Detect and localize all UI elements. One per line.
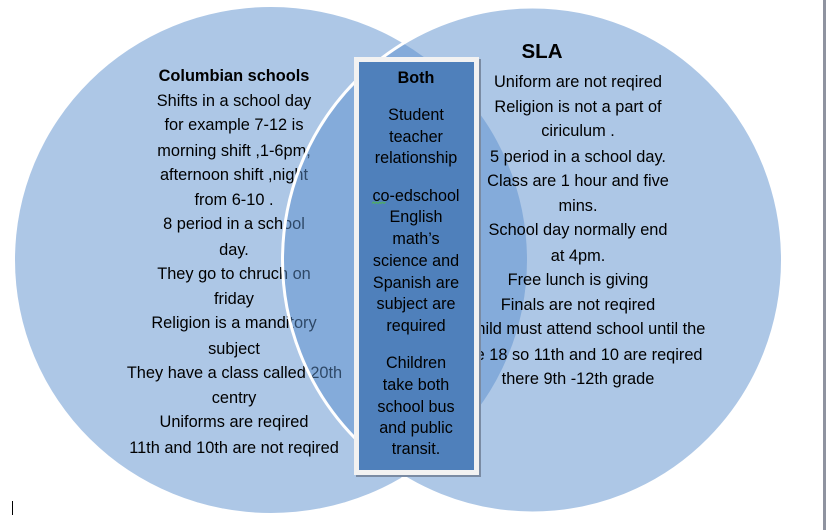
text block: SLA: Class are 1 hour and five: [487, 172, 669, 190]
text block: Columbian schools: Shifts in a school day: [157, 92, 312, 110]
panel: Both: transit.: [392, 440, 440, 458]
panel: Both: [354, 57, 481, 477]
circle: Columbian schools: [15, 7, 527, 513]
panel: Both: Spanish are: [373, 274, 459, 292]
panel: Both: science and: [373, 252, 459, 270]
panel: Both: teacher: [389, 128, 444, 146]
panel: Both: co-edschool: [372, 187, 460, 205]
text block: SLA: Free lunch is giving: [508, 271, 648, 289]
text block: SLA: Religion is not a part of: [494, 98, 662, 116]
text block: SLA: Uniform are not reqired: [494, 73, 662, 91]
text block: SLA: at 4pm.: [551, 247, 605, 265]
text block: Columbian schools: [127, 67, 342, 457]
text cursor: [12, 501, 13, 515]
circle: SLA: [282, 7, 782, 513]
panel: Both: Children: [386, 354, 446, 372]
text block: SLA: 5 period in a school day.: [490, 148, 666, 166]
text block: Columbian schools: Religion is a manditory: [151, 314, 317, 332]
panel: Both: take both: [383, 376, 449, 394]
text block: SLA: Finals are not reqired: [501, 296, 655, 314]
text block: Columbian schools: friday: [214, 290, 255, 308]
text block: Columbian schools: from 6-10 .: [194, 191, 274, 209]
text block: Columbian schools: 8 period in a school: [163, 215, 305, 233]
window edge: [823, 0, 826, 530]
text block: SLA: age 18 so 11th and 10 are reqired: [457, 346, 703, 364]
text block: SLA: mins.: [558, 197, 598, 215]
text block: Columbian schools: They go to chruch on: [157, 265, 311, 283]
panel: Both: school bus: [377, 398, 455, 416]
text block: Columbian schools: They have a class called 20th: [127, 364, 342, 382]
text block: SLA: there 9th -12th grade: [502, 370, 654, 388]
text block: Columbian schools: centry: [212, 389, 257, 407]
panel: Both: relationship: [375, 149, 457, 167]
text block: Columbian schools: for example 7-12 is: [164, 116, 304, 134]
panel: Both: math’s: [392, 230, 440, 248]
text block: Columbian schools: subject: [208, 340, 260, 358]
panel: Both: Student: [388, 106, 444, 124]
text block: Columbian schools: Uniforms are reqired: [160, 413, 308, 431]
text block: SLA: [457, 40, 705, 388]
panel: Both: and public: [379, 419, 453, 437]
text block: Columbian schools: afternoon shift ,night: [160, 166, 309, 184]
panel: Both: required: [386, 317, 446, 335]
text block: Columbian schools: morning shift ,1-6pm,: [157, 142, 311, 160]
text block: Columbian schools: 11th and 10th are not reqired: [129, 439, 339, 457]
icon: spellcheck squiggle: [372, 202, 386, 204]
panel: Both: English: [390, 208, 442, 226]
text block: SLA: School day normally end: [489, 221, 667, 239]
heading: Both: Both: [398, 69, 434, 87]
panel: Both: subject are: [377, 295, 455, 313]
text block: Columbian schools: Columbian schools: [159, 67, 309, 85]
text block: Columbian schools: day.: [219, 241, 249, 259]
heading: SLA: SLA: [522, 40, 563, 63]
text block: SLA: ciriculum .: [541, 122, 615, 140]
text block: SLA: Child must attend school until the: [465, 320, 705, 338]
